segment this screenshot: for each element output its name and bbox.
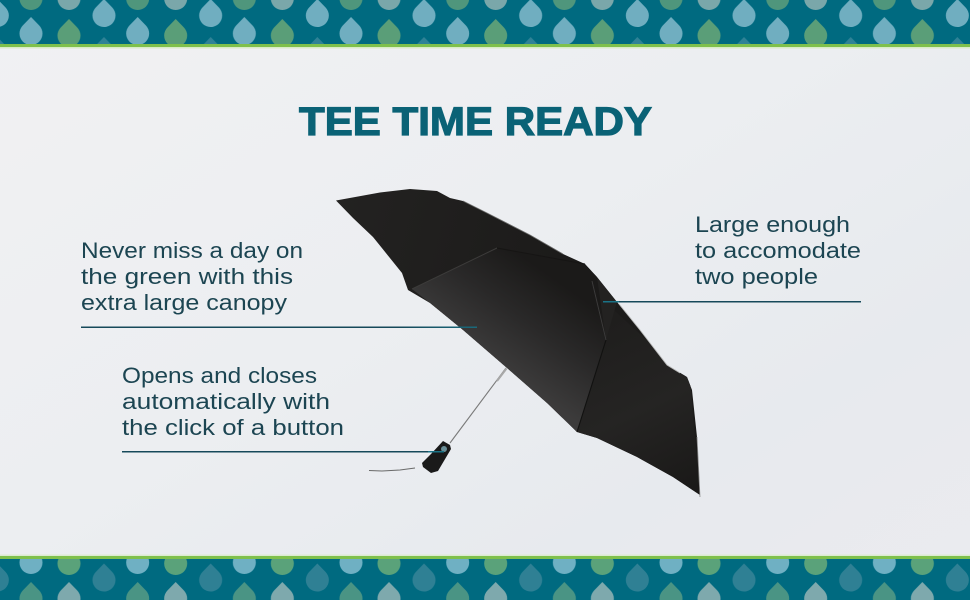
- icon: umbrella canopy: [336, 189, 700, 497]
- callout: two people: Large enough: [695, 212, 850, 237]
- callout: canopy: the green with this: [81, 264, 293, 289]
- bottom pattern band: [0, 554, 970, 600]
- callout: canopy: extra large canopy: [81, 290, 287, 315]
- callout: automatic button: the click of a button: [122, 415, 344, 440]
- icon: umbrella handle: [422, 441, 451, 473]
- top pattern band: [0, 0, 970, 48]
- callout: two people: two people: [695, 264, 818, 289]
- callout: canopy: [81, 238, 477, 328]
- callout: automatic button: automatically with: [122, 389, 330, 414]
- icon: wrist strap: [369, 468, 415, 471]
- callout: two people: [603, 212, 861, 302]
- callout: automatic button: [122, 363, 444, 452]
- title: TEE TIME READY: [299, 100, 652, 144]
- callout: two people: to accomodate: [695, 238, 861, 263]
- callout: automatic button: Opens and closes: [122, 363, 317, 388]
- icon: umbrella shaft: [450, 368, 506, 443]
- umbrella: [336, 189, 700, 497]
- callout: canopy: Never miss a day on: [81, 238, 303, 263]
